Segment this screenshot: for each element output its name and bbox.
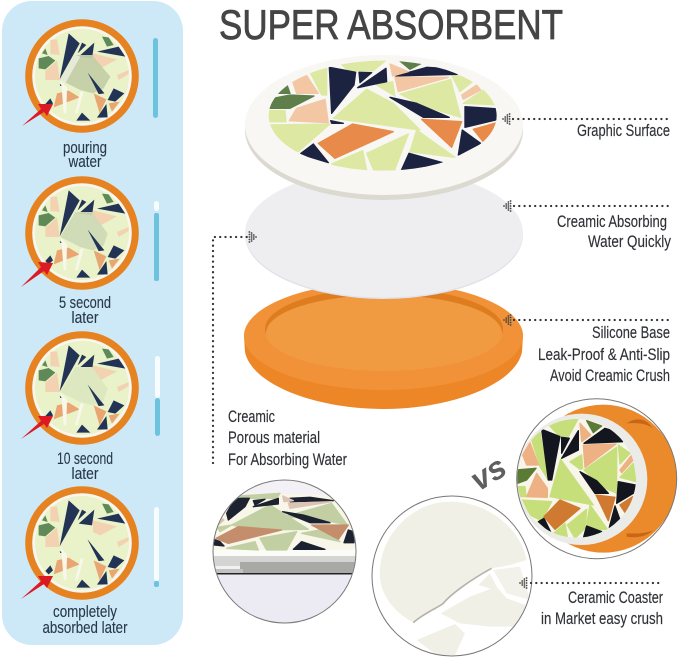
caption: pouring xyxy=(63,138,107,157)
large shard xyxy=(380,502,527,623)
water level bar xyxy=(153,38,158,118)
silicone base layer xyxy=(244,282,523,409)
icon: dry coaster xyxy=(29,490,135,596)
title: SUPER ABSORBENT xyxy=(219,1,563,48)
callout: porous material xyxy=(213,231,347,469)
caption: later xyxy=(72,464,99,483)
ceramic absorbing layer xyxy=(245,168,523,299)
arrow: red pointer xyxy=(21,576,53,599)
background panel: absorption timeline xyxy=(2,1,183,645)
icon: coaster with faint water xyxy=(29,335,135,441)
vs mark: vs xyxy=(463,448,513,498)
callout: ceramic absorbing water quickly xyxy=(503,200,671,251)
caption: water xyxy=(68,152,102,171)
inset: coaster edge close-up xyxy=(213,480,357,625)
inset: broken ceramic coaster xyxy=(372,496,532,656)
step 2: 5 second later xyxy=(21,180,159,327)
arrow: red pointer xyxy=(22,104,53,126)
callout: graphic surface xyxy=(502,113,670,140)
caption: completely xyxy=(53,602,117,621)
mosaic pattern xyxy=(267,58,500,173)
step 4: completely absorbed later xyxy=(21,490,159,637)
callout: silicone base xyxy=(503,314,670,385)
arrow: red pointer xyxy=(21,262,53,287)
callout: porous material: For Absorbing Water xyxy=(228,450,347,469)
step 1: pouring water xyxy=(22,23,158,171)
inset: silicone-protected coaster xyxy=(516,398,678,560)
caption: later xyxy=(72,308,99,327)
callout: porous material: Creamic xyxy=(228,407,275,426)
step 3: 10 second later xyxy=(21,335,160,483)
caption: 5 second xyxy=(59,293,111,312)
callout: porous material: Porous material xyxy=(228,428,320,447)
caption: absorbed later xyxy=(42,618,128,637)
water level bar xyxy=(154,201,159,281)
arrow: red pointer xyxy=(21,416,53,439)
graphic surface coaster xyxy=(245,55,523,200)
caption: 10 second xyxy=(57,449,113,468)
icon: coaster with fading water xyxy=(29,180,135,286)
water level bar xyxy=(154,507,159,587)
icon: coaster with water xyxy=(29,23,135,129)
callout: ceramic coaster in market xyxy=(519,577,663,628)
water level bar xyxy=(155,356,160,436)
orange silicone edge xyxy=(563,404,676,553)
